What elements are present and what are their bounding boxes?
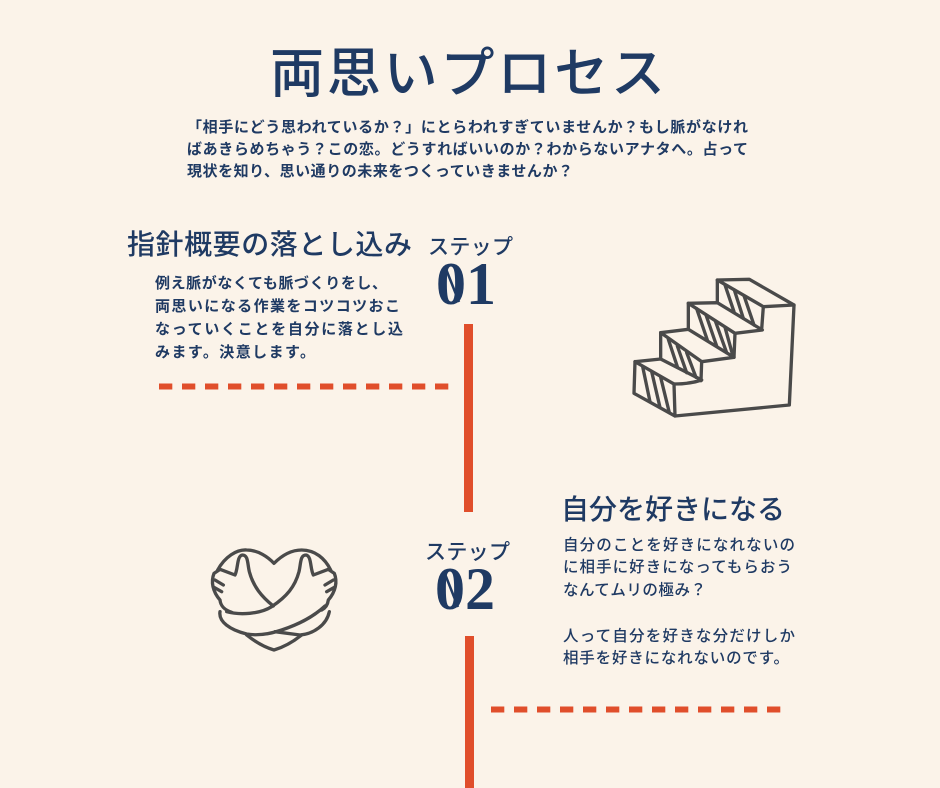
step 2 description: に相手に好きになってもらおう: [563, 558, 792, 576]
step 2 description: [563, 536, 795, 667]
intro text: ばあきらめちゃう？この恋。どうすればいいのか？わからないアナタへ。占って: [187, 140, 748, 158]
step 1 description: [155, 274, 403, 361]
panel: step 2: [212, 494, 795, 788]
intro text: 現状を知り、思い通りの未来をつくっていきませんか？: [187, 162, 573, 180]
step 2 heading: 自分を好きになる: [561, 494, 785, 525]
icon: heart hugging itself: [212, 550, 336, 650]
panel: step 1: [127, 229, 794, 512]
step 1 label: ステップ: [428, 236, 513, 259]
step 1 description: 例え脈がなくても脈づくりをし、: [155, 274, 387, 292]
step 2 description: なんてムリの極み？: [563, 581, 706, 599]
step 2 description: 人って自分を好きな分だけしか: [563, 627, 795, 645]
step 1 dashed connector: [159, 384, 449, 390]
step 1 heading: 指針概要の落とし込み: [127, 229, 412, 260]
step 1 description: なっていくことを自分に落とし込: [155, 320, 403, 338]
step 1 timeline bar: [464, 324, 473, 512]
step 2 dashed connector: [491, 706, 781, 712]
title: 両思いプロセス: [270, 44, 665, 104]
step 2 number: 02: [435, 556, 495, 622]
step 1 number: 01: [436, 251, 496, 317]
step 2 description: 自分のことを好きになれないの: [563, 536, 795, 554]
step 2 label: ステップ: [425, 541, 510, 564]
icon: stairs: [634, 279, 794, 416]
step 2 description: 相手を好きになれないのです。: [563, 649, 789, 667]
intro text: [187, 118, 748, 180]
step 1 description: みます。決意します。: [155, 343, 315, 361]
step 1 description: 両思いになる作業をコツコツおこ: [155, 297, 400, 315]
step 2 timeline bar: [465, 636, 474, 788]
intro text: 「相手にどう思われているか？」にとらわれすぎていませんか？もし脈がなけれ: [187, 118, 748, 136]
